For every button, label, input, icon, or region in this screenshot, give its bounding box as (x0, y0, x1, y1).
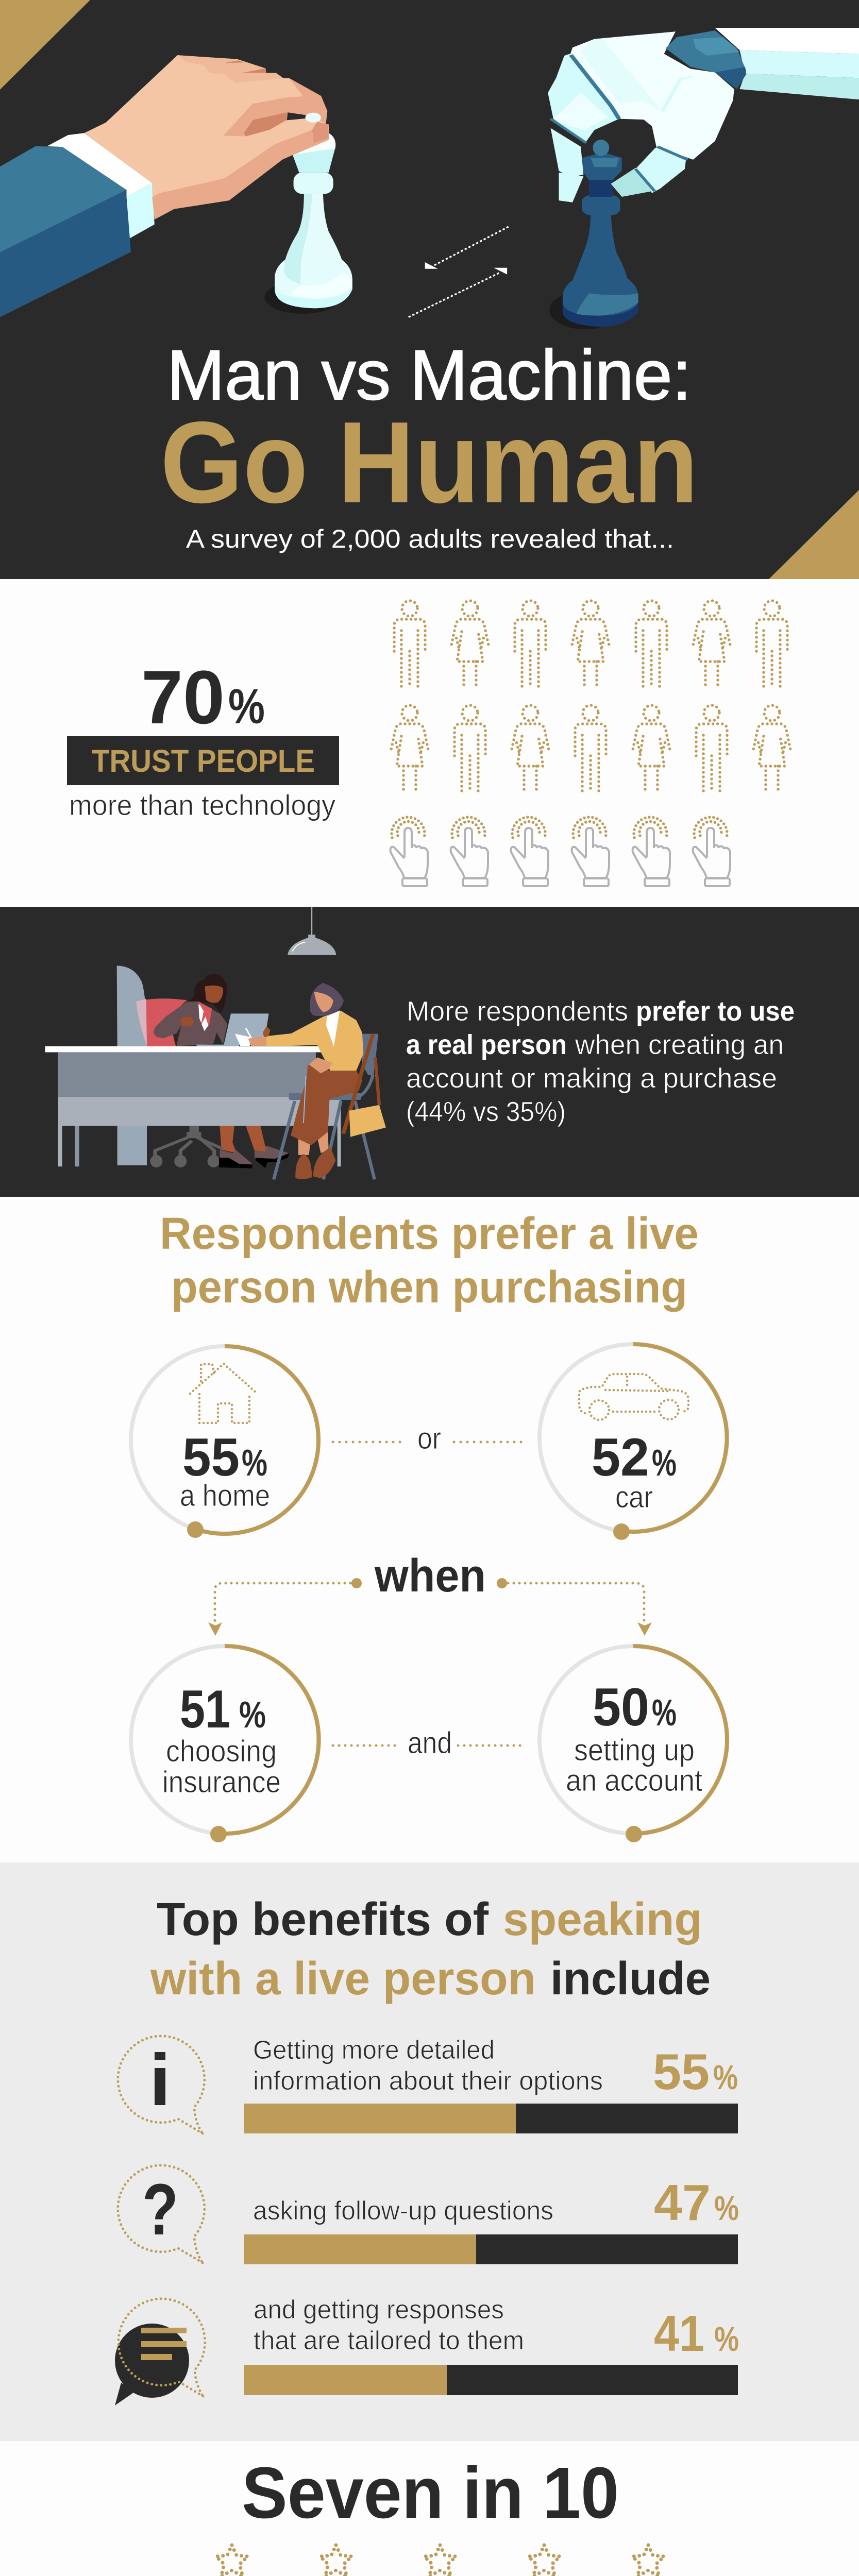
text: prefer to use a real person: account or making a purchase (406, 1063, 777, 1094)
heading: Respondents prefer a live (160, 1209, 699, 1259)
stat ring: a home 55%: 55 (182, 1428, 240, 1487)
connector: or: or (417, 1421, 441, 1455)
panel: seven in 10 (0, 2441, 859, 2576)
stat ring: car 52%: car (615, 1480, 653, 1514)
stat ring: choosing insurance 51%: 51 (180, 1680, 230, 1739)
illustration: human hand with white queen (0, 55, 352, 317)
benefit row: tailored responses 41%: and getting responses (254, 2295, 504, 2324)
heading: speaking (503, 1894, 702, 1945)
text: prefer to use a real person: More respondents (407, 996, 628, 1027)
icon: question bubble (118, 2165, 205, 2263)
stat: 70%: % (228, 679, 265, 734)
text: prefer to use a real person: when creating an (575, 1029, 784, 1060)
icon grid: stars over hands, 7 of 10 gold (182, 2545, 677, 2576)
illustration: office desk with two women (45, 907, 386, 1179)
connector: when with arrows: when (374, 1550, 486, 1602)
connector: and: and (408, 1726, 452, 1760)
stat: 70%: 70 (141, 655, 225, 740)
stat ring: a home 55%: % (242, 1443, 267, 1484)
heading: include (550, 1953, 711, 2005)
heading: Top benefits of (157, 1894, 489, 1945)
benefit row: tailored responses 41%: 41 (654, 2305, 704, 2362)
stat ring: setting up an account 50% (540, 1646, 727, 1842)
text: prefer to use a real person (406, 996, 795, 1127)
heading (160, 1209, 699, 1312)
stat ring: choosing insurance 51%: % (239, 1694, 266, 1736)
benefit row: tailored responses 41%: that are tailored to them (254, 2326, 524, 2355)
arrow: machine to human (425, 227, 509, 269)
benefit row: detailed information 55%: % (713, 2058, 738, 2097)
benefit row: detailed information 55%: information about their options (253, 2066, 603, 2095)
benefit row: follow-up questions 47%: asking follow-up questions (253, 2196, 553, 2225)
text: more than technology: more than technology (69, 789, 335, 821)
stat ring: a home 55% (131, 1346, 318, 1538)
heading: person when purchasing (171, 1262, 687, 1312)
benefit row: follow-up questions 47%: 47 (654, 2174, 711, 2231)
subtitle: A survey of 2,000 adults revealed that... (186, 524, 674, 553)
title: man vs machine: Man vs Machine: (167, 336, 692, 415)
arrow: human to machine (409, 268, 507, 317)
stat ring: car 52% (540, 1344, 727, 1540)
benefit row: tailored responses 41% (115, 2295, 739, 2405)
stat ring: choosing insurance 51%: insurance (162, 1765, 281, 1799)
benefit row: follow-up questions 47%: % (714, 2189, 739, 2228)
benefit row: detailed information 55% (118, 2035, 738, 2133)
icon: info bubble (118, 2036, 205, 2133)
icon: chat bubble (115, 2299, 205, 2405)
heading: Seven in 10 (242, 2452, 619, 2533)
text: prefer to use a real person: a real person (406, 1029, 567, 1060)
title: go human: Go Human (160, 397, 698, 527)
benefit row: detailed information 55%: Getting more detailed (253, 2035, 495, 2064)
label box: trust people (67, 736, 339, 785)
stat ring: setting up an account 50%: setting up (574, 1733, 695, 1767)
panel: header (0, 0, 859, 579)
heading (150, 1894, 711, 2005)
text: prefer to use a real person: prefer to use (636, 996, 795, 1027)
connector: when with arrows (208, 1550, 652, 1636)
icon: question bubble: ? (142, 2168, 178, 2250)
icon grid: people and tapping hands (391, 601, 790, 886)
stat: 70% (141, 655, 265, 740)
stat ring: car 52%: % (652, 1443, 677, 1484)
stat ring: setting up an account 50%: an account (566, 1764, 702, 1798)
illustration: robot hand with dark queen (548, 28, 859, 329)
benefit row: follow-up questions 47% (118, 2165, 739, 2264)
panel: respondents prefer a live person (0, 1197, 859, 1862)
stat ring: setting up an account 50%: % (652, 1692, 677, 1734)
benefit row: detailed information 55%: 55 (653, 2043, 710, 2100)
heading: with a live person (150, 1953, 536, 2005)
label box: trust people: TRUST PEOPLE (92, 743, 315, 778)
benefit row: tailored responses 41%: % (714, 2320, 739, 2359)
stat ring: car 52%: 52 (592, 1428, 649, 1487)
panel: top benefits (0, 1862, 859, 2441)
panel: prefer a real person (0, 907, 859, 1197)
panel: 70 percent trust people (0, 579, 859, 907)
stat ring: a home 55%: a home (180, 1479, 270, 1513)
text: prefer to use a real person: (44% vs 35%) (406, 1096, 566, 1127)
stat ring: choosing insurance 51% (131, 1646, 319, 1842)
stat ring: setting up an account 50%: 50 (593, 1677, 649, 1737)
stat ring: choosing insurance 51%: choosing (166, 1734, 277, 1768)
